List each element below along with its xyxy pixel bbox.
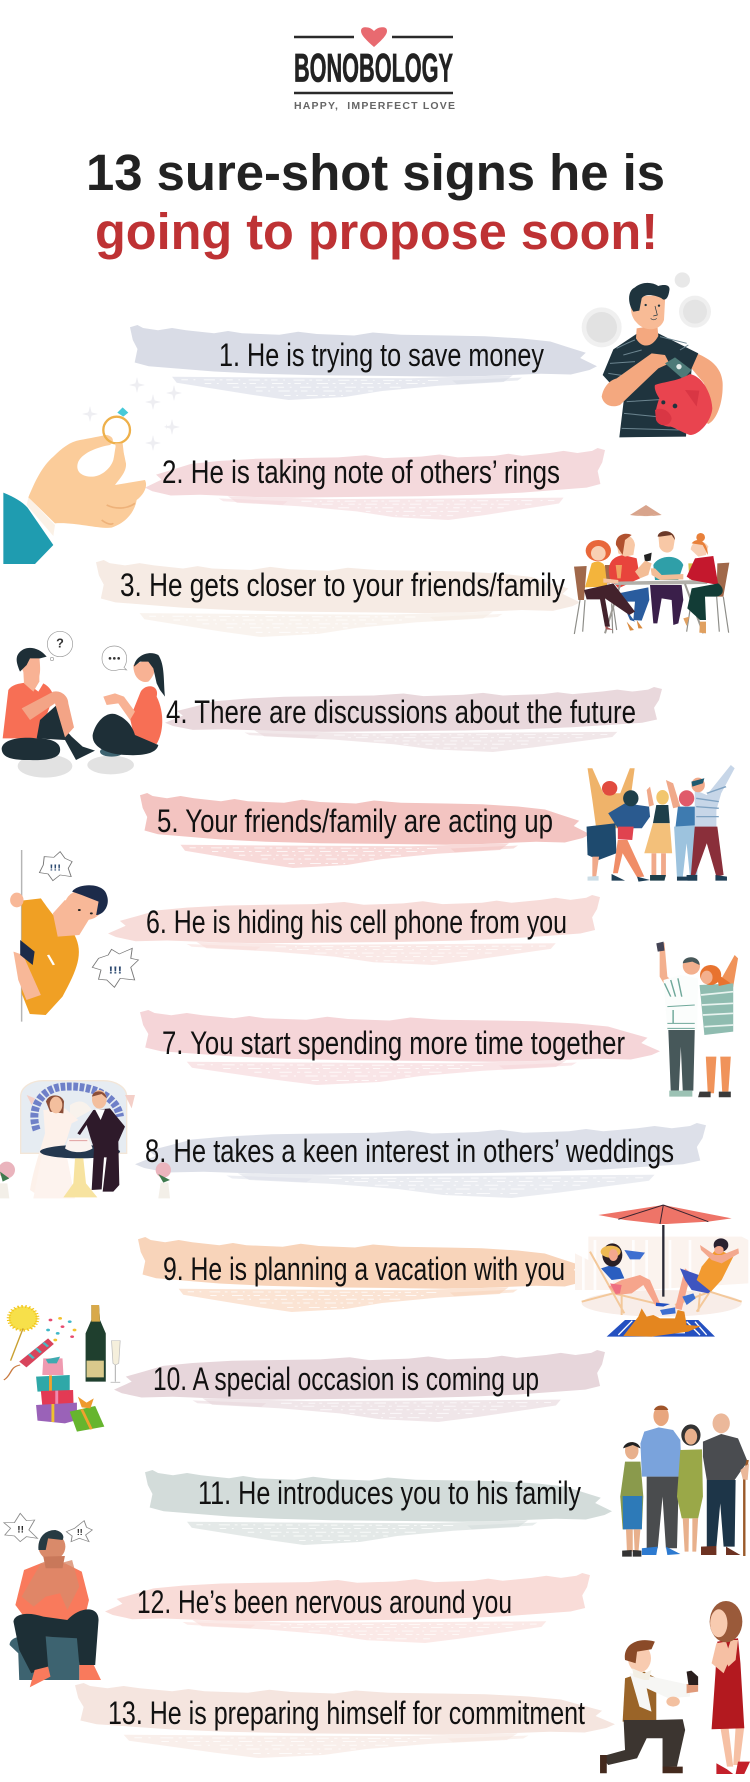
- sign 1: saving money: [130, 272, 723, 437]
- sign 9: planning a vacation: [138, 1205, 748, 1337]
- brush stroke: [145, 448, 605, 520]
- logo rules: [294, 37, 453, 93]
- icon: alert burst lower: [92, 948, 138, 987]
- sign text: 1. He is trying to save money: [219, 337, 544, 373]
- icon: alert burst upper: !!!: [50, 863, 61, 873]
- sign 2: noting rings: [3, 377, 605, 564]
- icon: couple on beach chairs: [575, 1205, 748, 1337]
- brush stroke: [140, 793, 590, 868]
- icon: heart: [361, 27, 387, 47]
- sign 7: spending more time together: [140, 942, 738, 1097]
- sign text: 7. You start spending more time together: [162, 1025, 625, 1061]
- title: [86, 144, 665, 260]
- brush stroke: [75, 1683, 615, 1758]
- brush stroke: [135, 1123, 706, 1198]
- brush stroke: [138, 1237, 590, 1312]
- icon: nervous man sitting: !!: [17, 1525, 24, 1535]
- sign text: 13. He is preparing himself for commitment: [108, 1695, 585, 1731]
- sign 10: special occasion: [4, 1305, 605, 1432]
- logo tagline: HAPPY, IMPERFECT LOVE: [294, 100, 455, 112]
- sign 4: discussions about the future: [2, 631, 662, 778]
- sign 12: nervous around you: [4, 1513, 590, 1687]
- title line 1: 13 sure-shot signs he is: [86, 144, 665, 201]
- icon: nervous man sitting: !!: [77, 1528, 83, 1537]
- sign text: 5. Your friends/family are acting up: [157, 803, 553, 839]
- icon: party items: [4, 1305, 120, 1432]
- brush stroke: [130, 325, 597, 400]
- icon: couple taking selfie: [656, 942, 738, 1097]
- logo: Bonobology: [294, 27, 455, 112]
- icon: man peeking with phone: [10, 850, 138, 1022]
- brush stroke: [105, 1573, 590, 1643]
- brush stroke: [96, 560, 580, 637]
- brush stroke: [114, 1350, 605, 1422]
- sign text: 10. A special occasion is coming up: [153, 1361, 539, 1397]
- sign 13: preparing for commitment: [75, 1601, 750, 1774]
- icon: couple talking: ?: [56, 636, 64, 650]
- icon: alert burst upper: [39, 852, 72, 881]
- sign 6: hiding cell phone: [10, 850, 600, 1022]
- icon: sparkles: [82, 377, 182, 451]
- icon: family group: [620, 1405, 749, 1557]
- sign text: 3. He gets closer to your friends/family: [120, 567, 565, 603]
- sign 11: introducing family: [145, 1405, 749, 1557]
- sign text: 6. He is hiding his cell phone from you: [146, 904, 567, 940]
- icon: man proposing to woman: [600, 1601, 750, 1774]
- icon: couple talking: [2, 631, 165, 778]
- brush stroke: [140, 1010, 660, 1085]
- title line 2: going to propose soon!: [95, 203, 658, 260]
- sign text: 9. He is planning a vacation with you: [163, 1251, 565, 1287]
- icon: man with piggy bank: [582, 272, 723, 437]
- logo wordmark: BONOBOLOGY: [294, 46, 453, 90]
- icon: wedding couple cutting cake: [0, 1081, 135, 1198]
- sign text: 4. There are discussions about the future: [166, 694, 636, 730]
- brush stroke: [145, 1470, 612, 1545]
- sign text: 11. He introduces you to his family: [198, 1475, 581, 1511]
- brush stroke: [165, 687, 662, 752]
- icon: friends at table: [574, 505, 729, 634]
- sign text: 2. He is taking note of others’ rings: [162, 454, 560, 490]
- sign 3: friends and family: [96, 505, 729, 637]
- brush stroke: [108, 895, 600, 965]
- sign 8: interest in weddings: [0, 1081, 706, 1198]
- icon: flower stand: [156, 1162, 171, 1198]
- icon: cheering group: [587, 765, 735, 882]
- sign text: 12. He’s been nervous around you: [137, 1584, 512, 1620]
- icon: alert burst lower: !!!: [109, 964, 122, 976]
- icon: nervous man sitting: [4, 1513, 101, 1687]
- sign 5: friends and family acting up: [140, 765, 735, 882]
- icon: hand holding ring: [3, 407, 169, 564]
